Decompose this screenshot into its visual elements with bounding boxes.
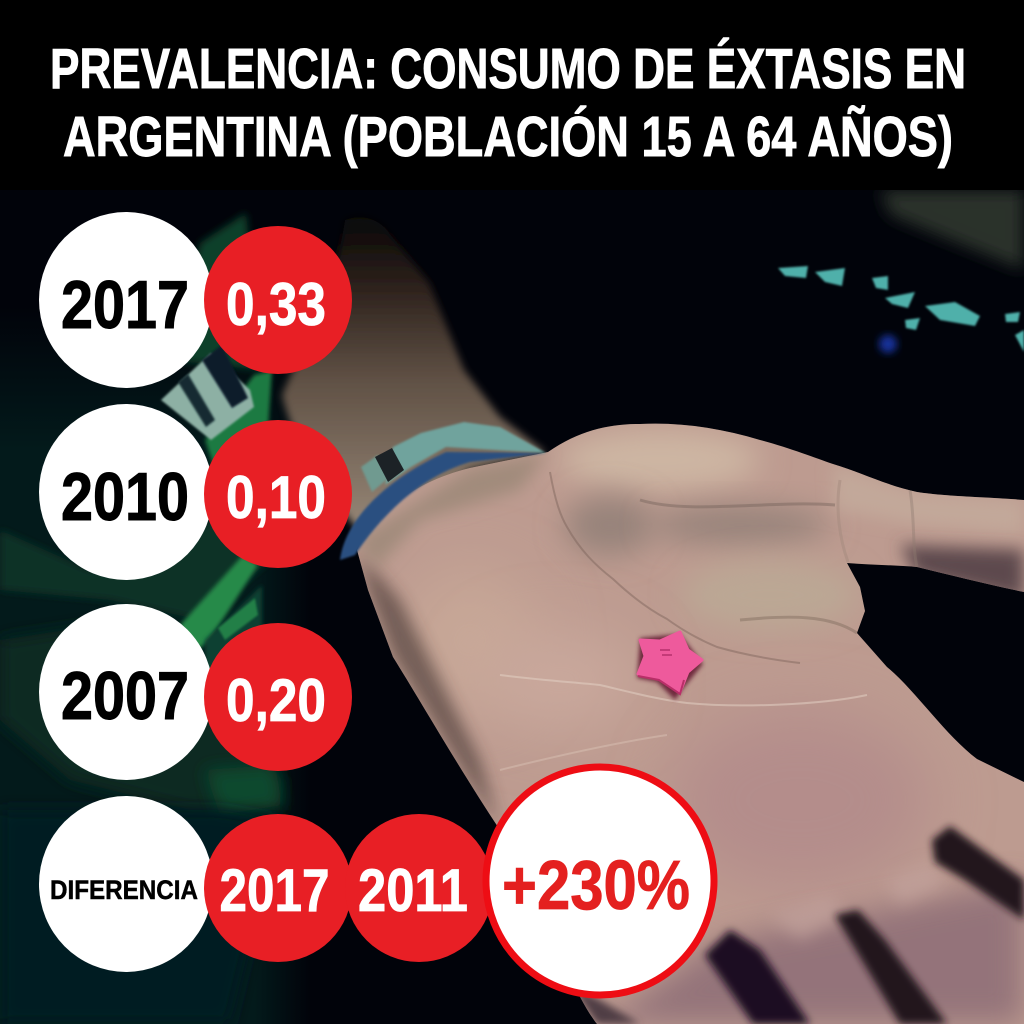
row: 2017 <box>39 212 352 388</box>
finger gaps <box>932 826 1024 920</box>
row: 2010: 2010 <box>61 459 189 535</box>
icon: pink star pill <box>637 632 703 700</box>
row: 2017: 2017 <box>61 267 189 343</box>
hand <box>340 410 1024 1024</box>
bracelet <box>340 422 546 560</box>
shirt patch <box>161 353 254 440</box>
title <box>50 37 966 169</box>
row: diferencia: 2011 <box>358 857 468 924</box>
row: diferencia: +230% <box>502 846 690 924</box>
palm tones <box>560 430 760 490</box>
row: diferencia: DIFERENCIA <box>50 875 198 905</box>
row: 2010: 0,10 <box>226 464 326 531</box>
fingers <box>600 880 1024 1024</box>
palm creases <box>550 472 800 663</box>
row: diferencia <box>39 767 714 995</box>
green shirt <box>0 190 310 1024</box>
background lights <box>778 266 1024 352</box>
forearm <box>282 217 546 540</box>
row: 2010 <box>39 404 352 580</box>
row: 2007 <box>39 604 352 780</box>
row: diferencia: 2017 <box>220 857 330 924</box>
title band <box>0 0 1024 190</box>
row: 2017: 0,33 <box>226 271 326 338</box>
row: 2007: 2007 <box>61 658 189 734</box>
row: 2007: 0,20 <box>226 667 326 734</box>
